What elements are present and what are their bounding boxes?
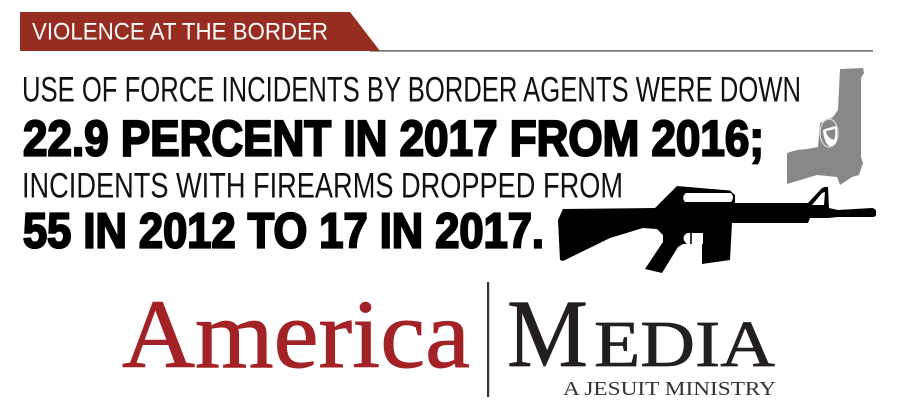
icon: handgun bbox=[787, 68, 864, 185]
logo divider bbox=[487, 282, 489, 397]
icon: rifle bbox=[558, 186, 876, 273]
statement line 2: 22.9 PERCENT IN 2017 FROM 2016; bbox=[23, 111, 764, 167]
logo: Media bbox=[507, 280, 775, 387]
logo tagline: A JESUIT MINISTRY bbox=[563, 378, 776, 400]
logo: America: America bbox=[122, 281, 470, 389]
logo: Media: M bbox=[507, 280, 588, 387]
header banner bbox=[20, 12, 380, 51]
statement line 3: INCIDENTS WITH FIREARMS DROPPED FROM bbox=[22, 166, 623, 205]
logo: Media: EDIA bbox=[594, 308, 775, 381]
statement line 4: 55 IN 2012 TO 17 IN 2017. bbox=[23, 204, 544, 258]
banner title: VIOLENCE AT THE BORDER bbox=[32, 19, 328, 45]
